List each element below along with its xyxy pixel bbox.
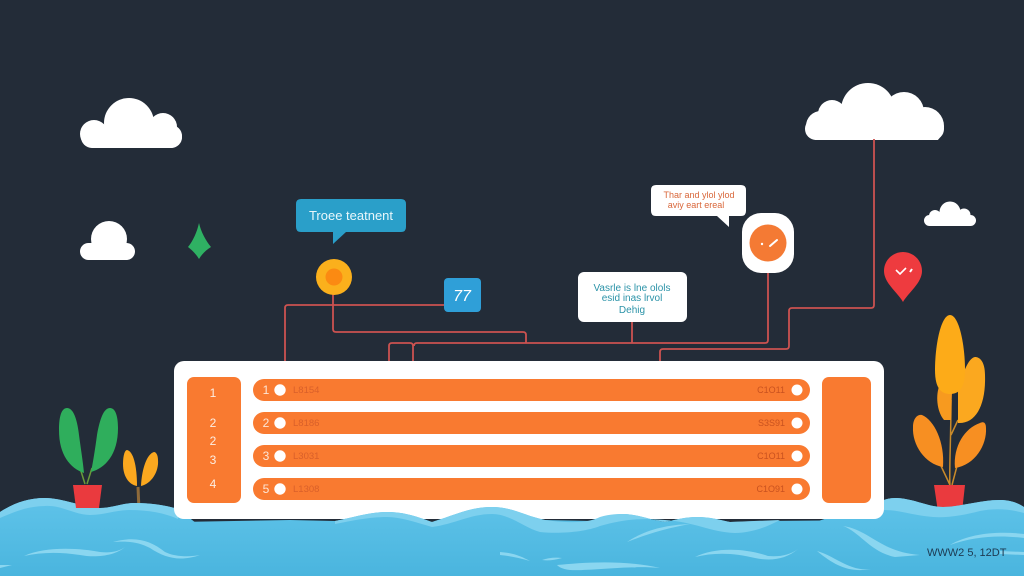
callout: note box: esid inas lrvol: [602, 293, 662, 304]
row 3: 3: [263, 449, 270, 463]
badge: 77: 77: [453, 288, 472, 305]
row 1: C1O11: [757, 385, 785, 395]
ripples: [627, 524, 690, 542]
row 1: 1: [263, 383, 270, 397]
callout: note box: Vasrle is lne olols: [593, 283, 671, 294]
row 1: L8154: [293, 385, 319, 396]
plant: small orange: [123, 450, 158, 510]
row 1: [253, 379, 810, 401]
callout: white bubble: [651, 185, 746, 227]
callout: note box: Dehig: [619, 305, 645, 316]
cloud: small right: [924, 202, 976, 226]
icon: green spade: [188, 223, 211, 259]
row 3: L3031: [293, 451, 319, 462]
pot: left: [73, 485, 102, 508]
panel: left number tab: [187, 377, 241, 503]
panel: left number tab: 4: [210, 477, 217, 491]
callout: note box: [578, 272, 687, 322]
row 3: [253, 445, 810, 467]
callout: white bubble: aviy eart ereal: [668, 200, 724, 210]
row 4: [253, 478, 810, 500]
row 3: C1O11: [757, 451, 785, 461]
panel: main card: [174, 361, 884, 519]
icon: red map pin: [884, 252, 922, 302]
row 2: 2: [263, 416, 270, 430]
row 4: L1308: [293, 484, 319, 495]
callout: blue bubble: Troee teatnent: [309, 208, 393, 223]
callout: white bubble: Thar and ylol ylod: [663, 190, 735, 200]
panel: left number tab: 2: [210, 434, 217, 448]
icon: orange check badge: [742, 213, 794, 273]
row 2: L8186: [293, 418, 319, 429]
date label: WWW2 5, 12DT: [927, 547, 1007, 559]
panel: right tab: [822, 377, 871, 503]
panel: left number tab: 3: [210, 453, 217, 467]
water foreground waves: [0, 507, 1024, 576]
row 2: S3S91: [758, 418, 785, 428]
pot: right: [934, 485, 965, 512]
row 4: 5: [263, 482, 270, 496]
badge: 77: [444, 278, 481, 312]
water background: [0, 498, 1024, 576]
cloud: upper left: [80, 98, 182, 148]
plant: green left: [59, 408, 118, 484]
panel: left number tab: 2: [210, 416, 217, 430]
callout: blue bubble: [296, 199, 406, 244]
icon: yellow node: [316, 259, 352, 295]
cloud: upper right: [805, 83, 944, 145]
row 4: C1O91: [756, 484, 785, 494]
cloud: lower left: [80, 221, 135, 260]
plant: orange right: [913, 315, 986, 512]
panel: left number tab: 1: [210, 386, 217, 400]
row 2: [253, 412, 810, 434]
connector lines: [285, 139, 874, 362]
